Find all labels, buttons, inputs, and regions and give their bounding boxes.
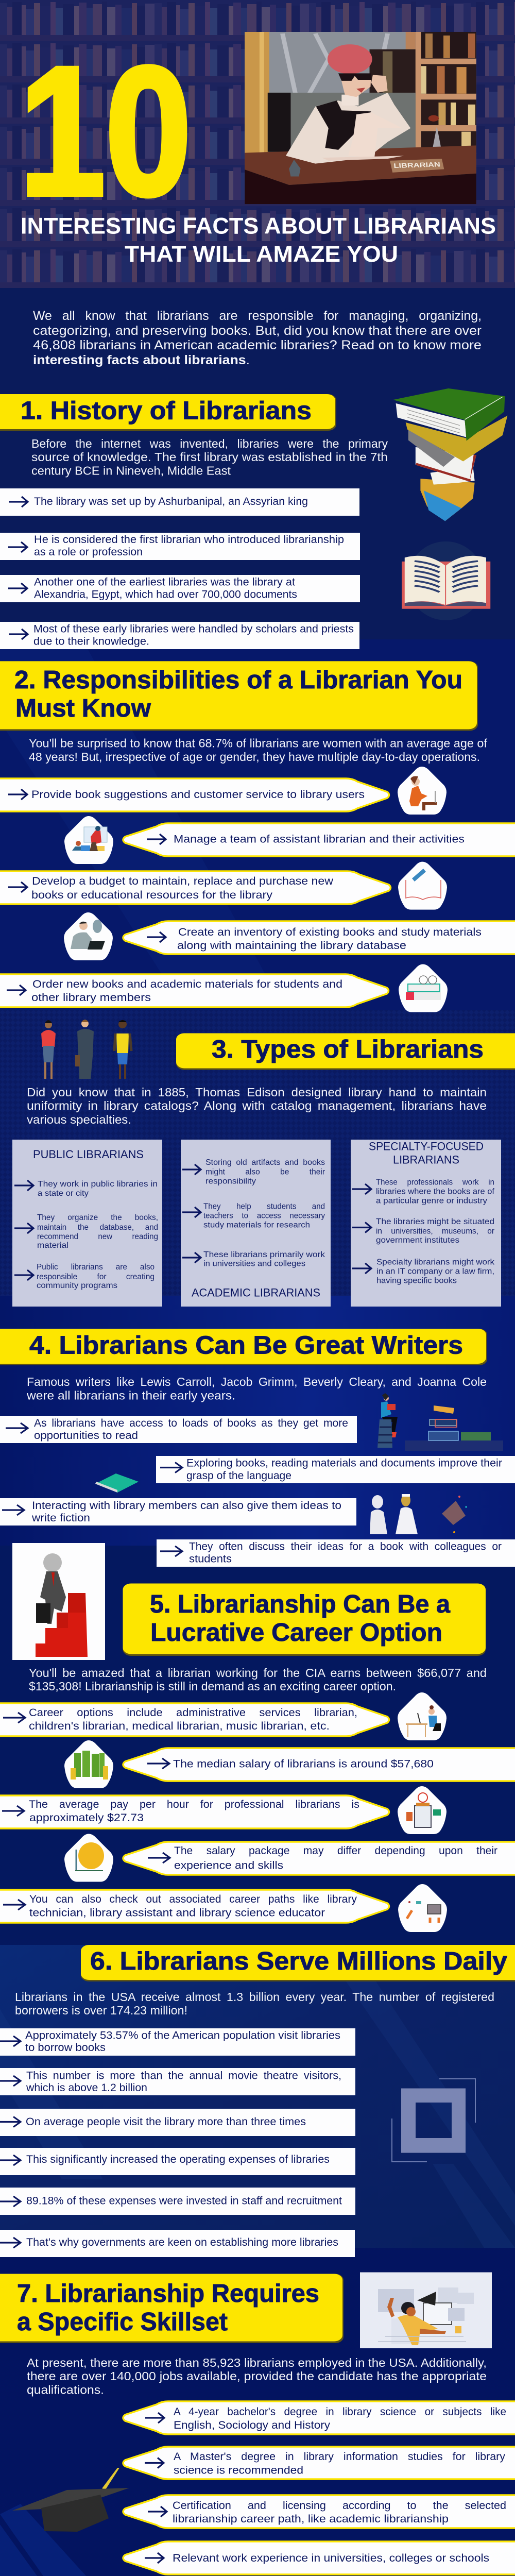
text: desk sign: LIBRARIAN <box>393 161 440 170</box>
icon: team at whiteboard <box>64 816 113 864</box>
icon: person at computer <box>398 767 447 815</box>
callout arrow box: along with maintaining the library database <box>177 939 406 952</box>
paragraph: Did you know that in 1885, Thomas Edison designed library hand to maintain <box>27 1086 487 1099</box>
panel: academic librarians: teachers to access necessary <box>203 1212 325 1220</box>
paragraph: 48 years! But, irrespective of age or gender, they have multiple day-to-day operations. <box>29 750 480 764</box>
icon: picture frame <box>392 2079 475 2162</box>
callout arrow box <box>0 778 389 811</box>
illustration: books on shelf <box>405 1405 503 1451</box>
icon: book and pencil <box>398 862 447 910</box>
paragraph: qualifications. <box>27 2383 104 2397</box>
bullet: as a role or profession <box>34 546 143 558</box>
callout arrow box: librarianship career path, like academic librarianship <box>173 2513 449 2525</box>
panel: public librarians: They organize the books, <box>37 1213 158 1222</box>
panel: academic librarians <box>181 1140 331 1307</box>
intro paragraph <box>33 309 482 367</box>
panel: public librarians: Public librarians are also <box>37 1263 154 1272</box>
callout arrow box <box>123 1842 515 1875</box>
paragraph: You'll be surprised to know that 68.7% of librarians are women with an average age of <box>29 737 488 750</box>
bullet <box>156 1456 515 1483</box>
bullet: The library was set up by Ashurbanipal, an Assyrian king <box>34 495 308 507</box>
paragraph <box>27 2356 487 2397</box>
callout arrow box: Order new books and academic materials for students and <box>32 978 342 990</box>
bullet: write fiction <box>31 1512 90 1524</box>
bullet <box>157 1539 515 1567</box>
icon: gold coin and plant <box>64 1834 113 1882</box>
panel: public librarians: maintain the database, and <box>37 1223 158 1232</box>
panel: academic librarians: ACADEMIC LIBRARIANS <box>192 1286 320 1299</box>
callout arrow box: Manage a team of assistant librarian and their activities <box>174 833 465 845</box>
callout arrow box: technician, library assistant and library science educator <box>29 1906 325 1919</box>
heading 1: 1. History of Librarians <box>21 397 312 425</box>
title: INTERESTING FACTS ABOUT LIBRARIANS <box>21 213 496 239</box>
heading 2: 2. Responsibilities of a Librarian You <box>14 666 462 694</box>
icon: books with glasses <box>399 964 448 1012</box>
callout arrow box <box>123 1748 515 1781</box>
title <box>21 213 496 267</box>
heading 5: 5. Librarianship Can Be a <box>150 1590 451 1618</box>
heading 5: Lucrative Career Option <box>150 1619 442 1647</box>
bullet: students <box>189 1553 232 1565</box>
heading 4: 4. Librarians Can Be Great Writers <box>29 1332 463 1360</box>
section 4: librarians can be great writers <box>0 1329 515 1567</box>
paragraph: Librarians in the USA receive almost 1.3 billion every year. The number of registered <box>15 1990 494 2004</box>
callout arrow box: books or educational resources for the library <box>31 889 272 901</box>
bullet: due to their knowledge. <box>33 635 149 648</box>
intro paragraph: 46,808 librarians in American academic libraries? Read on to know more <box>33 338 482 352</box>
bullet <box>0 1416 357 1443</box>
bullet <box>0 622 359 649</box>
paragraph: Famous writers like Lewis Carroll, Jacob Grimm, Beverly Cleary, and Joanna Cole <box>27 1375 487 1388</box>
paragraph: $135,308! Librarianship is still in demand as an exciting career option. <box>29 1680 396 1693</box>
callout arrow box <box>0 974 388 1007</box>
paragraph: various specialties. <box>27 1113 131 1126</box>
callout arrow box: children's librarian, medical librarian, music librarian, etc. <box>29 1720 330 1732</box>
panel: specialty-focused librarians: in an IT company or a law firm, <box>376 1267 494 1276</box>
bullet <box>0 575 360 602</box>
section 2: responsibilities <box>0 661 515 1012</box>
paragraph: borrowers is over 174.23 million! <box>15 2004 187 2017</box>
panel: academic librarians: responsibility <box>205 1177 256 1186</box>
paragraph: were all librarians in their early years. <box>26 1389 235 1402</box>
bullet <box>0 2028 355 2056</box>
bullet <box>0 533 360 560</box>
panel: public librarians: a state or city <box>38 1189 89 1198</box>
paragraph <box>29 737 488 764</box>
bullet <box>0 2148 355 2175</box>
panel: academic librarians: might also be their <box>205 1167 325 1177</box>
icon: man with laptop and shield <box>64 912 113 960</box>
callout arrow box: You can also check out associated career paths like library <box>29 1893 357 1905</box>
panel: public librarians: They work in public libraries in <box>38 1180 158 1189</box>
bullet: opportunities to read <box>34 1429 138 1442</box>
bullet: This significantly increased the operating expenses of libraries <box>26 2153 330 2165</box>
bullet: That's why governments are keen on establishing more libraries <box>26 2236 338 2248</box>
bullet: They often discuss their ideas for a book with colleagues or <box>189 1540 502 1552</box>
bullet: He is considered the first librarian who introduced librarianship <box>34 533 344 546</box>
heading 7: a Specific Skillset <box>17 2308 228 2336</box>
heading 7 <box>0 2274 344 2343</box>
intro paragraph: interesting facts about librarians . <box>33 353 250 367</box>
heading 3 <box>176 1033 515 1070</box>
panel: specialty-focused librarians: libraries where the books are of <box>376 1187 495 1196</box>
icon: woman at desk <box>398 1692 447 1740</box>
icon: floating tablet <box>442 1496 467 1533</box>
panel: specialty-focused librarians: government institutes <box>376 1236 459 1245</box>
callout arrow box: A 4-year bachelor's degree in library science or subjects like <box>174 2405 506 2418</box>
panel: academic librarians: in universities and colleges <box>203 1259 305 1268</box>
paragraph: century BCE in Nineveh, Middle East <box>31 464 231 477</box>
bullet: to borrow books <box>25 2041 106 2054</box>
callout arrow box: approximately $27.73 <box>29 1811 144 1824</box>
callout arrow box: Develop a budget to maintain, replace and purchase new <box>32 875 333 887</box>
big number 10: 10 <box>20 29 192 233</box>
callout arrow box <box>0 1890 389 1923</box>
panel: specialty-focused librarians: in universities, museums, or <box>376 1227 494 1235</box>
panel: academic librarians: These librarians primarily work <box>203 1250 325 1259</box>
illustration: cartoon librarian at desk <box>245 32 476 204</box>
bullet: Most of these early libraries were handled by scholars and priests <box>33 622 354 635</box>
panel: specialty-focused librarians: Specialty librarians might work <box>376 1258 494 1267</box>
callout arrow box <box>123 823 515 856</box>
panel: academic librarians: Storing old artifacts and books <box>205 1158 325 1167</box>
heading 4 <box>0 1329 487 1365</box>
callout arrow box <box>123 2401 515 2434</box>
illustration: businessman climbing red bars <box>12 1543 105 1660</box>
section 7: specific skillset <box>0 2272 515 2576</box>
paragraph <box>15 1990 494 2017</box>
icon: open book <box>402 541 490 620</box>
heading 6 <box>81 1945 515 1981</box>
icon: clipboard and clock <box>398 1786 447 1834</box>
bullet <box>0 488 359 516</box>
paragraph <box>26 1375 487 1402</box>
bullet: Approximately 53.57% of the American population visit libraries <box>25 2029 340 2041</box>
bullet: Another one of the earliest libraries was the library at <box>34 576 295 588</box>
callout arrow box: science is recommended <box>174 2464 303 2476</box>
panel: public librarians: material <box>37 1241 68 1250</box>
heading 1 <box>0 394 336 431</box>
callout arrow box <box>123 2447 515 2479</box>
heading 5 <box>123 1584 486 1656</box>
paragraph: You'll be amazed that a librarian working for the CIA earns between $66,077 and <box>29 1666 487 1680</box>
paragraph: uniformity in library catalogs? Along with catalog management, librarians have <box>27 1099 487 1112</box>
section 1: history of librarians <box>0 388 507 649</box>
paragraph: source of knowledge. The first library was established in the 7th <box>31 450 388 464</box>
callout arrow box <box>0 1795 389 1828</box>
callout arrow box: Certification and licensing according to the selected <box>173 2499 506 2512</box>
heading 2 <box>0 661 478 731</box>
heading 3: 3. Types of Librarians <box>212 1036 484 1063</box>
bullet: Interacting with library members can also give them ideas to <box>32 1499 341 1512</box>
intro paragraph: We all know that librarians are responsible for managing, organizing, <box>33 309 482 323</box>
paragraph <box>31 437 388 477</box>
panel: specialty-focused librarians: LIBRARIANS <box>393 1153 459 1166</box>
panel: public librarians: PUBLIC LIBRARIANS <box>33 1148 144 1161</box>
callout arrow box <box>123 2495 515 2528</box>
callout arrow box: experience and skills <box>174 1859 283 1871</box>
bullet: As librarians have access to loads of books as they get more <box>34 1417 348 1429</box>
callout arrow box: The average pay per hour for professional librarians is <box>29 1798 359 1810</box>
icon: graduation cap <box>12 2468 129 2532</box>
callout arrow box: Provide book suggestions and customer service to library users <box>31 788 365 801</box>
bullet <box>0 2109 355 2136</box>
callout arrow box: other library members <box>31 991 151 1004</box>
panel: academic librarians: They help students and <box>203 1202 325 1211</box>
callout arrow box: A Master's degree in library information studies for library <box>174 2450 505 2463</box>
callout arrow box: English, Sociology and History <box>174 2419 330 2431</box>
callout arrow box <box>123 2541 515 2574</box>
bullet: This number is more than the annual movie theatre visitors, <box>26 2069 341 2081</box>
panel: specialty-focused librarians: These professionals work in <box>376 1178 494 1187</box>
section 6: librarians serve millions daily <box>0 1945 515 2257</box>
callout arrow box: The median salary of librarians is around $57,680 <box>173 1758 434 1770</box>
panel: specialty-focused librarians: having specific books <box>376 1277 457 1285</box>
illustration: two white figures <box>370 1494 418 1534</box>
bullet <box>0 2188 355 2215</box>
icon: green book <box>95 1473 139 1493</box>
callout arrow box: Create an inventory of existing books and study materials <box>178 926 482 938</box>
section 5: lucrative career option <box>0 1543 515 1932</box>
section 3: types of librarians <box>12 1020 515 1307</box>
illustration: three people <box>41 1020 131 1079</box>
paragraph <box>27 1086 487 1126</box>
bullet: which is above 1.2 billion <box>26 2081 147 2094</box>
callout arrow box: Career options include administrative services librarian, <box>29 1706 357 1719</box>
bullet: On average people visit the library more than three times <box>26 2115 306 2128</box>
panel: specialty-focused librarians: The libraries might be situated <box>376 1217 494 1226</box>
heading 7: 7. Librarianship Requires <box>17 2280 319 2308</box>
callout arrow box: The salary package may differ depending upon their <box>174 1844 497 1857</box>
bullet <box>0 1498 356 1526</box>
bullet <box>0 2068 355 2095</box>
bullet: Alexandria, Egypt, which had over 700,000 documents <box>34 588 297 601</box>
paragraph: At present, there are more than 85,923 librarians employed in the USA. Additionally, <box>27 2356 487 2369</box>
paragraph: there are over 140,000 jobs available, provided the candidate has the appropriate <box>27 2369 487 2383</box>
intro paragraph: categorizing, and preserving books. But, did you know that there are over <box>33 324 482 338</box>
heading 2: Must Know <box>15 694 151 722</box>
bullet: Exploring books, reading materials and documents improve their <box>186 1457 502 1469</box>
panel: public librarians: responsible for creating <box>37 1273 154 1281</box>
icon: stack of books <box>393 388 507 521</box>
panel: academic librarians: study materials for research <box>203 1221 310 1229</box>
header panel <box>20 29 496 267</box>
bullet: grasp of the language <box>186 1469 291 1482</box>
callout arrow box <box>0 1703 389 1736</box>
icon: stacks of money <box>64 1740 113 1788</box>
panel: specialty-focused librarians: a particular genre or industry <box>376 1196 487 1205</box>
paragraph <box>29 1666 487 1693</box>
icon: workspace from above <box>398 1884 447 1932</box>
heading 6: 6. Librarians Serve Millions Daily <box>90 1947 507 1975</box>
panel: specialty-focused librarians <box>351 1140 501 1307</box>
title: THAT WILL AMAZE YOU <box>125 242 398 267</box>
callout arrow box <box>0 871 390 904</box>
panel: public librarians <box>12 1140 162 1307</box>
callout arrow box: Relevant work experience in universities, colleges or schools <box>173 2552 489 2564</box>
bullet: 89.18% of these expenses were invested in staff and recruitment <box>26 2195 342 2207</box>
panel: specialty-focused librarians: SPECIALTY-FOCUSED <box>369 1140 484 1153</box>
bullet <box>0 2230 355 2257</box>
illustration: person at computer <box>360 2272 492 2348</box>
panel: public librarians: recommend new reading <box>37 1232 158 1241</box>
paragraph: Before the internet was invented, libraries were the primary <box>31 437 388 450</box>
callout arrow box <box>123 921 515 954</box>
panel: public librarians: community programs <box>37 1281 117 1290</box>
illustration: reader on book pile <box>377 1393 398 1448</box>
